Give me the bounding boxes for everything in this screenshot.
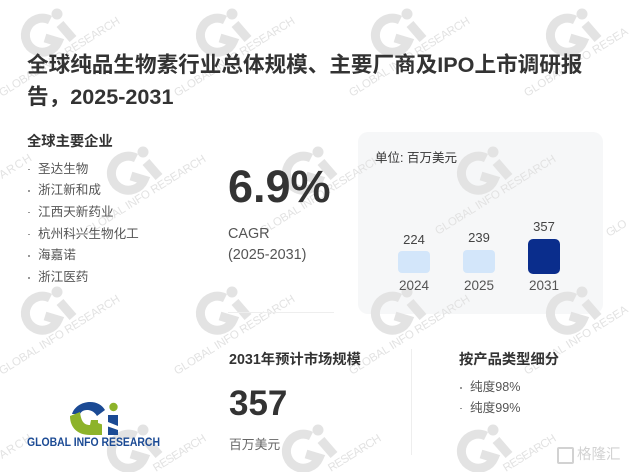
CAGR label — [228, 226, 306, 263]
bar 2025: 2025 — [464, 278, 494, 293]
product type list — [460, 380, 520, 414]
bar 2024: 224 — [403, 232, 425, 247]
company list: 圣达生物 — [38, 162, 88, 176]
panel: CAGR — [228, 161, 331, 263]
bar 2031 — [528, 219, 560, 293]
source badge: Gelonghui — [557, 446, 620, 464]
company list: 海嘉诺 — [38, 248, 76, 262]
company list — [28, 162, 139, 284]
panel: product type segments — [459, 352, 559, 414]
heading: product type: 按产品类型细分 — [459, 352, 559, 368]
CAGR label: (2025-2031) — [228, 247, 306, 263]
product type list: 纯度99% — [470, 400, 520, 414]
panel: global major companies — [27, 134, 139, 284]
bar 2025: 239 — [468, 230, 490, 245]
bar 2031: 2031 — [529, 278, 559, 293]
bar 2025 — [463, 230, 495, 293]
watermark pattern: GLOBAL INFO RESEARCH — [172, 15, 297, 100]
panel: unit chart background — [358, 132, 603, 314]
watermark pattern: GLOBAL INFO RESEA — [522, 304, 630, 378]
bar 2024 — [398, 232, 430, 293]
company list: 浙江医药 — [38, 270, 88, 284]
badge icon — [557, 447, 574, 464]
watermark pattern: GLOBAL INFO RESEARCH — [433, 153, 558, 238]
chart unit label: 单位: 百万美元 — [375, 151, 457, 165]
watermark pattern: GLOBAL INFO RESEARCH — [347, 293, 472, 378]
title: 全球纯品生物素行业总体规模、主要厂商及IPO上市调研报告，2025-2031 — [27, 52, 582, 109]
CAGR value: 6.9% — [228, 161, 331, 212]
badge name: 格隆汇 — [577, 447, 620, 463]
panel: 2031 forecast — [229, 352, 361, 452]
logo: Global Info Research — [27, 402, 160, 449]
company list: 浙江新和成 — [38, 183, 101, 197]
bar 2024: 2024 — [399, 278, 429, 293]
watermark pattern: GLOBAL INFO RESEA — [522, 26, 630, 100]
forecast unit: 百万美元 — [229, 437, 280, 452]
watermark pattern: GLOBAL INFO RESEARCH — [83, 153, 208, 238]
product type list: 纯度98% — [470, 380, 520, 394]
watermark pattern: GLO — [604, 218, 629, 240]
CAGR label: CAGR — [228, 226, 270, 242]
watermark pattern: GLOBAL INFO RESEARCH — [0, 293, 122, 378]
company list: 杭州科兴生物化工 — [38, 227, 139, 241]
watermark pattern: GLOBAL INFO RESEARCH — [347, 15, 472, 100]
forecast heading: 2031年预计市场规模 — [229, 352, 361, 368]
bar chart: market size — [375, 151, 560, 293]
logo: Global Info Research: GLOBAL INFO RESEARCH — [27, 437, 160, 449]
watermark pattern: GLOBAL INFO RESEARCH — [172, 293, 297, 378]
bar 2031: 357 — [533, 219, 555, 234]
watermark pattern: GLOBAL INFO RESEARCH — [0, 15, 122, 100]
company list: 江西天新药业 — [38, 205, 114, 219]
forecast value: 357 — [229, 384, 287, 423]
watermark pattern: GLOBAL INFO RESEARCH — [258, 153, 383, 238]
heading: major companies: 全球主要企业 — [27, 134, 113, 150]
